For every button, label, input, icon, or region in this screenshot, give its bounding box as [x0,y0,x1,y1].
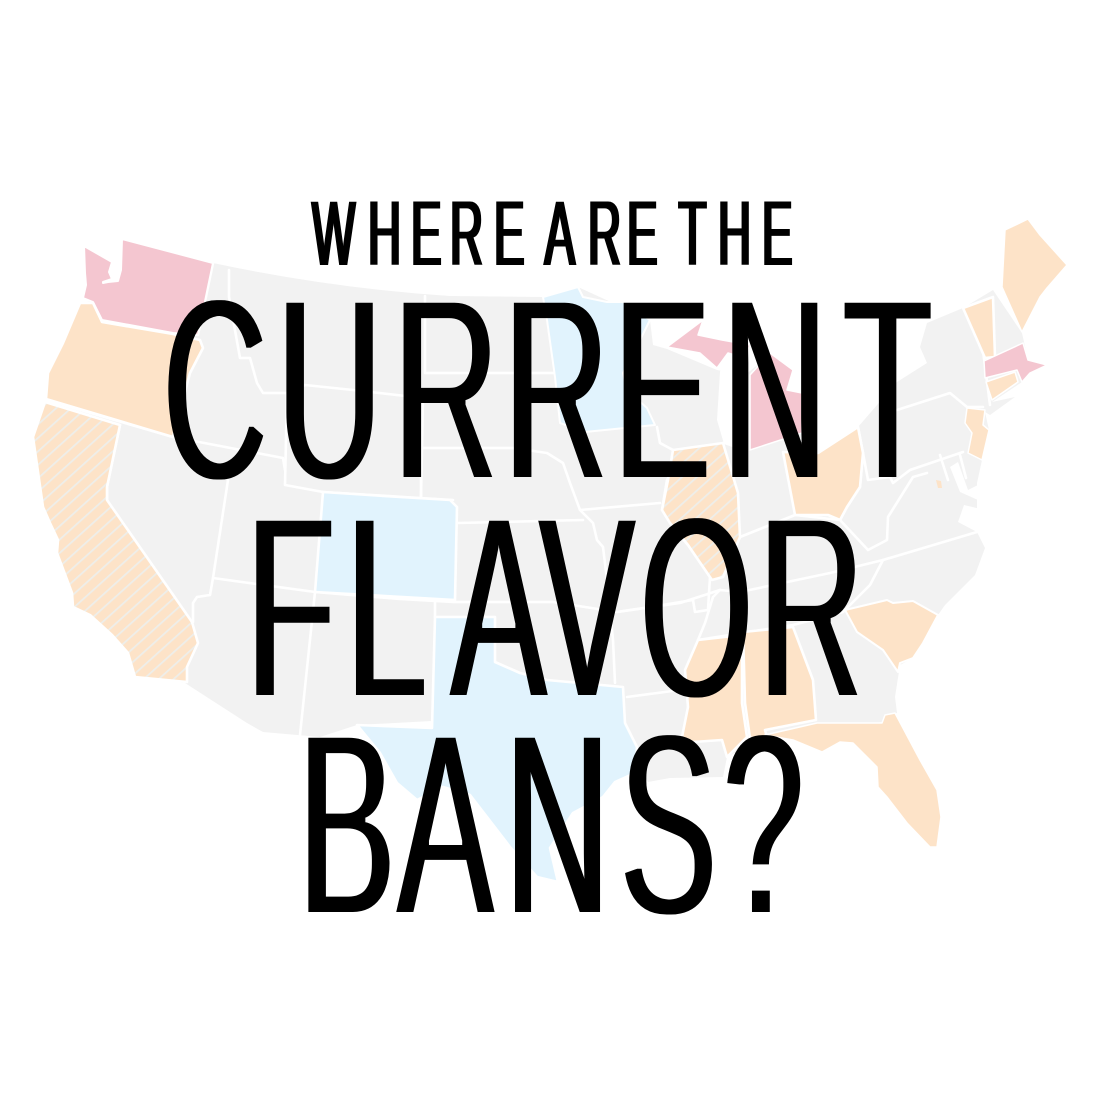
state: Connecticut [986,372,1018,400]
state: Washington [83,239,213,335]
state: Illinois hatched [662,443,740,580]
lakes and bays [717,352,985,532]
state: Maine [1002,219,1067,332]
state: Minnesota [543,287,655,432]
state: Colorado [315,492,457,600]
state: New Jersey [965,408,989,460]
base land: grey states [46,263,1028,782]
heading [163,183,932,970]
heading line: current: CURRENT [163,246,932,535]
state: Massachusetts [984,343,1047,382]
state: Florida [765,713,941,847]
heading line: bans: BANS? [298,681,804,970]
state: Alabama [743,627,816,738]
state: DC [936,480,942,488]
state: Oregon [46,303,203,437]
state: Vermont [963,297,995,358]
heading line: flavor: FLAVOR [246,464,864,753]
state: Michigan lower [750,353,802,450]
state: Mississippi [682,635,747,757]
state: Texas [357,617,637,882]
state: California hatched [33,402,198,682]
state: Ohio [783,427,863,520]
heading line: where are the: WHERE ARE THE [312,183,793,285]
map of US states [33,219,1067,882]
state: South Carolina [845,600,938,672]
state: Michigan upper [667,320,750,368]
state boundaries [46,263,990,735]
